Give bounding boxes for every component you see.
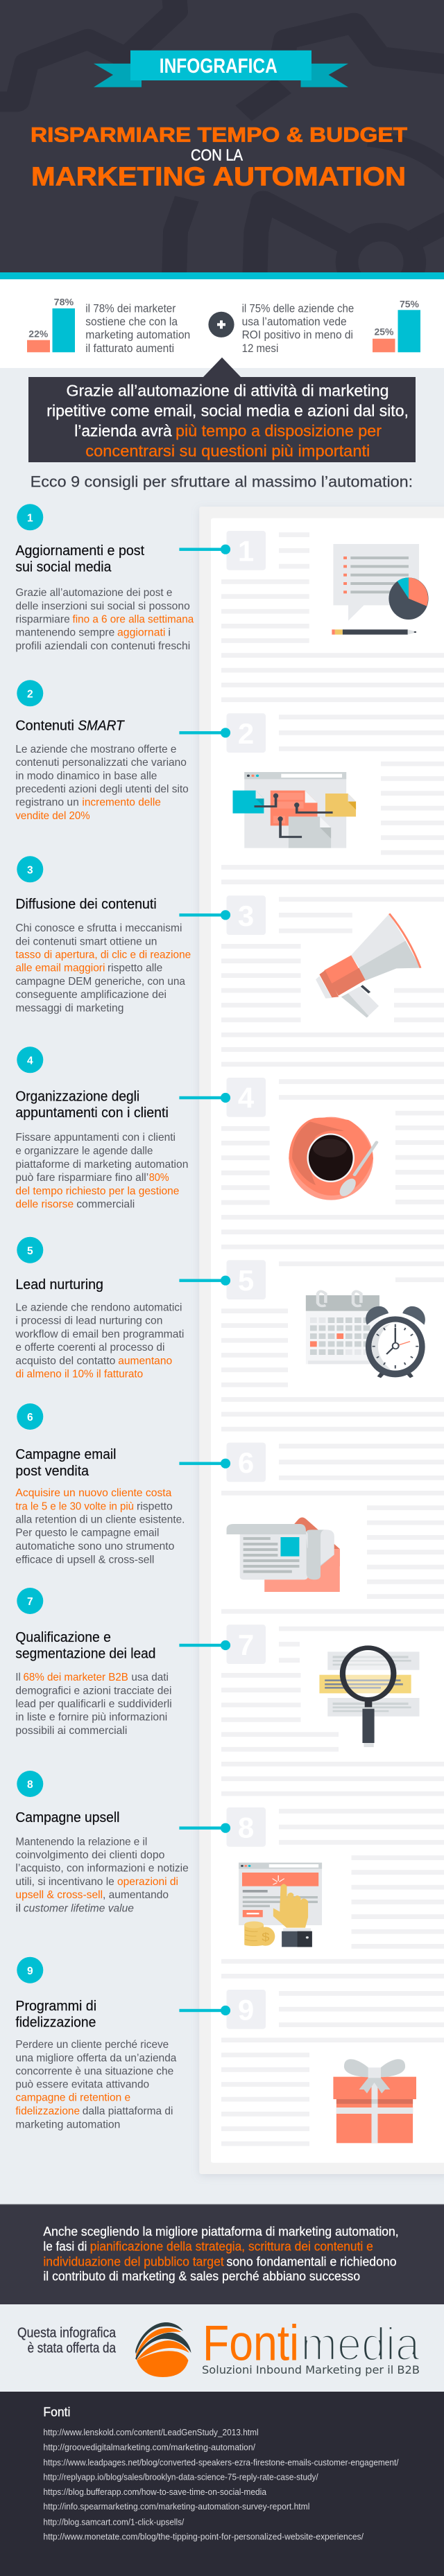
heading 9	[15, 1999, 96, 2031]
body 8	[15, 1836, 189, 1914]
body 6: rispetto	[137, 1500, 173, 1512]
heading 3: Diffusione dei contenuti	[15, 897, 157, 912]
panel: conclusion: sono fondamentali e richiedono	[226, 2254, 397, 2268]
icon: speech bubble, pie chart and pencil	[332, 544, 429, 635]
body 5: workflow di email ben programmati	[15, 1329, 184, 1340]
number block 7	[226, 1624, 266, 1664]
body 4: può fare risparmiare fino all’	[15, 1172, 148, 1184]
body 3: Chi conosce e sfrutta i meccanismi	[15, 922, 182, 934]
logo mark	[135, 2322, 191, 2377]
badge 3: 3	[27, 865, 33, 876]
stat text: 78%: il 78% dei marketer	[85, 302, 176, 315]
body 1: i	[168, 627, 171, 639]
sources list	[43, 2428, 399, 2542]
icon: magnifying glass	[319, 1648, 419, 1747]
stat text: 75%	[242, 302, 354, 355]
badge 1	[17, 504, 43, 530]
number block 8: 8	[238, 1812, 254, 1843]
number block 9: 9	[238, 1993, 254, 2026]
sources list: http://info.spearmarketing.com/marketing-automation-survey-report.html	[43, 2502, 309, 2512]
number block 3: 3	[238, 900, 254, 932]
callout	[28, 358, 416, 462]
panel: step 5	[15, 1237, 184, 1380]
body 1: Grazie all’automazione dei post e	[15, 587, 172, 599]
panel: step 1	[15, 504, 194, 652]
number block 9	[226, 1990, 266, 2029]
panel: step 9	[15, 1957, 176, 2130]
body 5: aumentano	[118, 1355, 172, 1367]
panel: step 4	[15, 1046, 188, 1210]
badge 6	[17, 1403, 43, 1430]
callout: concentrarsi su questioni più importanti	[85, 441, 370, 459]
heading 4: appuntamenti con i clienti	[15, 1105, 169, 1121]
stat text: 78%	[85, 302, 190, 355]
badge 8: 8	[27, 1779, 33, 1791]
badge 7: 7	[27, 1596, 33, 1608]
stat text: 75%: ROI positivo in meno di	[242, 328, 353, 342]
body 9: fidelizzazione	[15, 2105, 80, 2117]
badge 7	[17, 1588, 43, 1614]
body 9: concorrente è una situazione che	[15, 2065, 173, 2077]
body 2: in modo dinamico in base alle	[15, 770, 157, 782]
body 9: può essere evitata attivando	[15, 2078, 149, 2090]
icon: newsletter and envelope	[227, 1517, 340, 1592]
icon: browser with files	[233, 772, 356, 848]
connector 8	[179, 1823, 230, 1833]
stat text: 75%: 12 mesi	[242, 342, 278, 355]
heading 7: Qualificazione e	[15, 1630, 111, 1645]
heading 1: Aggiornamenti e post	[15, 543, 145, 559]
body 6	[15, 1487, 185, 1566]
body 6: Acquisire un nuovo cliente costa	[15, 1487, 171, 1499]
body 5	[15, 1302, 184, 1380]
number block 3	[226, 895, 266, 935]
stat text: 78%: marketing automation	[85, 328, 190, 342]
connector 1	[179, 545, 230, 554]
heading 4: Organizzazione degli	[15, 1089, 139, 1104]
heading 6: post vendita	[15, 1464, 89, 1479]
callout: Grazie all’automazione di attività di marketing	[67, 382, 388, 400]
body 5: acquisto del contatto	[15, 1355, 115, 1367]
heading 7	[15, 1630, 155, 1662]
body 9: Perdere un cliente perché riceve	[15, 2039, 169, 2051]
body 3: dei contenuti smart ottiene un	[15, 936, 157, 947]
icon: browser with hand and coins: $	[262, 1930, 270, 1943]
number block 6: 6	[238, 1446, 254, 1479]
badge 9: 9	[27, 1965, 33, 1977]
icon: calendar and alarm clock	[306, 1291, 425, 1378]
panel: header	[0, 0, 444, 292]
body 1: mantenendo sempre	[15, 627, 114, 639]
body 3: rispetto alle	[108, 963, 162, 974]
body 9	[15, 2039, 176, 2130]
body 8: utili, si incentivano le	[15, 1876, 114, 1888]
title	[31, 124, 407, 192]
body 8: l’acquisto, con informazioni e notizie	[15, 1863, 189, 1875]
panel: statistics	[0, 279, 444, 368]
panel: conclusion: il contributo di marketing & sales perché abbiano successo	[43, 2269, 360, 2284]
heading 5: Lead nurturing	[15, 1277, 103, 1293]
body 1	[15, 587, 194, 652]
body 5: Le aziende che rendono automatici	[15, 1302, 182, 1313]
body 2: Le aziende che mostrano offerte e	[15, 744, 176, 755]
sources list: https://blog.bufferapp.com/how-to-save-time-on-social-media	[43, 2487, 266, 2497]
body 5: di almeno il 10% il fatturato	[15, 1368, 143, 1380]
body 3: messaggi di marketing	[15, 1002, 123, 1014]
body 2	[15, 744, 189, 822]
body 2: vendite del 20%	[15, 810, 90, 822]
bar chart: 75%: 25%	[375, 326, 394, 337]
body 7: demografici e azioni tracciate dei	[15, 1685, 171, 1697]
icon: browser with hand and coins	[239, 1863, 322, 1947]
heading 9: fidelizzazione	[15, 2015, 96, 2031]
sources list: http://blog.samcart.com/1-click-upsells/	[43, 2517, 185, 2527]
body 2: precedenti azioni degli utenti del sito	[15, 784, 189, 796]
body 1: aggiornati	[117, 627, 165, 639]
body 2: incremento delle	[82, 797, 161, 809]
callout: l’azienda avrà	[74, 421, 172, 439]
badge 2: 2	[27, 689, 33, 700]
badge 3	[17, 856, 43, 882]
panel: step 7	[15, 1588, 172, 1737]
bar chart: 78%	[27, 297, 75, 352]
title: RISPARMIARE TEMPO & BUDGET	[31, 124, 407, 147]
connector 7	[179, 1640, 230, 1650]
body 4	[15, 1132, 188, 1210]
callout: più tempo a disposizione per	[176, 421, 382, 439]
body 8: coinvolgimento dei clienti dopo	[15, 1850, 164, 1861]
icon: gift box	[333, 2059, 416, 2143]
heading 1	[15, 543, 145, 575]
badge 2	[17, 680, 43, 706]
heading 2	[15, 719, 125, 734]
panel: step 3	[15, 856, 191, 1014]
badge 4	[17, 1046, 43, 1073]
body 2: contenuti personalizzati che variano	[15, 757, 187, 769]
body 1: delle inserzioni sui social si possono	[15, 600, 190, 612]
body 7	[15, 1672, 172, 1737]
body 4: del tempo richiesto per la gestione	[15, 1185, 179, 1197]
stat text: 75%: il 75% delle aziende che	[242, 302, 354, 315]
badge 4: 4	[27, 1055, 33, 1067]
body 4: delle risorse	[15, 1198, 74, 1210]
sources list: http://replyapp.io/blog/sales/brooklyn-data-science-75-reply-rate-case-study/	[43, 2473, 318, 2482]
body 3: tasso di apertura, di clic e di reazione	[15, 949, 191, 961]
logo wordmark: Fonti	[203, 2315, 299, 2371]
sources list: http://www.lenskold.com/content/LeadGenStudy_2013.html	[43, 2428, 259, 2437]
panel: sources	[0, 2392, 444, 2576]
sources list: http://www.monetate.com/blog/the-tipping-point-for-personalized-website-experiences/	[43, 2532, 364, 2542]
sponsor text: Questa infografica	[17, 2326, 117, 2341]
panel: conclusion: Anche scegliendo la migliore piattaforma di marketing automation,	[43, 2224, 399, 2238]
heading 4	[15, 1089, 169, 1121]
body 6: alla retention di un cliente esistente.	[15, 1514, 185, 1525]
heading 7: segmentazione dei lead	[15, 1647, 155, 1662]
body 5: e offerte coerenti al processo di	[15, 1342, 164, 1353]
sources list: http://groovedigitalmarketing.com/marketing-automation/	[43, 2443, 256, 2453]
ribbon banner	[94, 51, 348, 87]
heading 9: Programmi di	[15, 1999, 96, 2014]
body 4: Fissare appuntamenti con i clienti	[15, 1132, 176, 1144]
body 3	[15, 922, 191, 1014]
connector 3	[179, 910, 230, 920]
sponsor text	[17, 2326, 117, 2356]
panel: step 8	[15, 1771, 189, 1914]
number block 2	[226, 713, 266, 753]
bar chart: 78%: 78%	[54, 297, 74, 308]
body 9: campagne di retention e	[15, 2092, 130, 2104]
body 4: piattaforme di marketing automation	[15, 1159, 188, 1171]
number block 5: 5	[238, 1264, 254, 1297]
callout: ripetitive come email, social media e azioni dal sito,	[46, 401, 409, 419]
body 7: lead per qualificarli e suddividerli	[15, 1699, 172, 1710]
badge 1: 1	[27, 513, 33, 524]
badge 5	[17, 1237, 43, 1263]
body 1: risparmiare	[15, 613, 70, 625]
number block 8	[226, 1807, 266, 1847]
number block 5	[226, 1260, 266, 1299]
number block 4: 4	[238, 1081, 255, 1114]
body 9: marketing automation	[15, 2119, 120, 2130]
logo wordmark: media	[301, 2317, 420, 2370]
icon: plus	[208, 312, 234, 338]
badge 5: 5	[27, 1245, 33, 1257]
badge 8	[17, 1771, 43, 1797]
sources list: https://www.leadpages.net/blog/converted-speakers-ezra-firestone-emails-customer-engagement/	[43, 2457, 399, 2467]
heading: 9 consigli: Ecco 9 consigli per sfruttare al massimo l’automation:	[31, 473, 413, 490]
body 6: Per questo le campagne email	[15, 1527, 159, 1539]
connector 2	[179, 728, 230, 737]
title: CON LA	[191, 146, 244, 164]
body 7: in liste e fornire più informazioni	[15, 1712, 167, 1724]
panel: conclusion: individuazione del pubblico target	[43, 2254, 224, 2268]
panel: document background	[199, 507, 444, 2174]
number block 6	[226, 1443, 266, 1482]
number block 7: 7	[238, 1629, 254, 1661]
body 7: Il	[15, 1672, 21, 1683]
connector 6	[179, 1459, 230, 1469]
heading 8: Campagne upsell	[15, 1810, 119, 1825]
body 9: una migliore offerta da un’azienda	[15, 2052, 176, 2064]
body 5: i processi di lead nurturing con	[15, 1315, 162, 1327]
badge 9	[17, 1957, 43, 1983]
connector 9	[179, 2006, 230, 2015]
body 2: registrano un	[15, 797, 79, 809]
stat text: 78%: sostiene che con la	[85, 315, 178, 328]
stat text: 75%: usa l’automation vede	[242, 315, 347, 328]
title: MARKETING AUTOMATION	[31, 163, 406, 192]
body 8: operazioni di	[117, 1876, 178, 1888]
panel: conclusion	[0, 2204, 444, 2304]
body 7: usa dati	[131, 1672, 169, 1683]
body 3: alle email maggiori	[15, 963, 105, 974]
connector 4	[179, 1093, 230, 1103]
logo wordmark	[202, 2315, 420, 2376]
body 6: efficace di upsell & cross-sell	[15, 1554, 154, 1566]
heading 2: SMART	[78, 719, 125, 734]
body 1: fino a 6 ore alla settimana	[72, 613, 194, 625]
ribbon banner: INFOGRAFICA	[160, 55, 278, 78]
heading 1: sui social media	[15, 560, 112, 575]
logo wordmark: Soluzioni Inbound Marketing per il B2B	[202, 2363, 420, 2376]
stat text: 78%: il fatturato aumenti	[85, 342, 174, 355]
body 4: commerciali	[76, 1198, 135, 1210]
body 8: customer lifetime value	[24, 1902, 134, 1914]
body 3: conseguente amplificazione dei	[15, 989, 166, 1001]
body 4: 80%	[149, 1172, 169, 1184]
sponsor text: è stata offerta da	[28, 2340, 117, 2356]
sources heading: Fonti	[43, 2406, 70, 2419]
body 8: upsell & cross-sell	[15, 1889, 103, 1901]
body 1: profili aziendali con contenuti freschi	[15, 640, 190, 652]
number block 4	[226, 1078, 266, 1117]
badge 6: 6	[27, 1412, 33, 1423]
number block 2: 2	[238, 717, 254, 750]
body 6: automatiche sono uno strumento	[15, 1541, 174, 1552]
heading 2: Contenuti	[15, 719, 74, 734]
heading 6	[15, 1447, 116, 1479]
connector 5	[179, 1276, 230, 1286]
panel: step 6	[15, 1403, 185, 1566]
bar chart: 75%: 75%	[400, 298, 420, 309]
icon: coffee cup	[289, 1117, 377, 1200]
body 4: e organizzare le agende dalle	[15, 1145, 153, 1157]
panel: step 2	[15, 680, 189, 822]
panel: conclusion: le fasi di	[43, 2239, 87, 2254]
body 8: il	[15, 1902, 21, 1914]
panel: conclusion: pianificazione della strategia, scrittura dei contenuti e	[90, 2239, 373, 2254]
bar chart: 75%	[373, 298, 420, 352]
body 3: campagne DEM generiche, con una	[15, 976, 185, 988]
number block 1: 1	[238, 535, 254, 567]
bar chart: 78%: 22%	[28, 328, 49, 340]
icon: megaphone	[316, 913, 420, 1017]
heading 6: Campagne email	[15, 1447, 116, 1462]
panel: sponsor	[0, 2304, 444, 2392]
body 7: possibili ai commerciali	[15, 1725, 127, 1737]
body 6: tra le 5 e le 30 volte in più	[15, 1500, 134, 1512]
body 8: , aumentando	[103, 1889, 169, 1901]
number block 1	[226, 531, 266, 570]
body 9: dalla piattaforma di	[83, 2105, 173, 2117]
body 8: Mantenendo la relazione e il	[15, 1836, 147, 1848]
body 7: 68% dei marketer B2B	[24, 1672, 128, 1683]
